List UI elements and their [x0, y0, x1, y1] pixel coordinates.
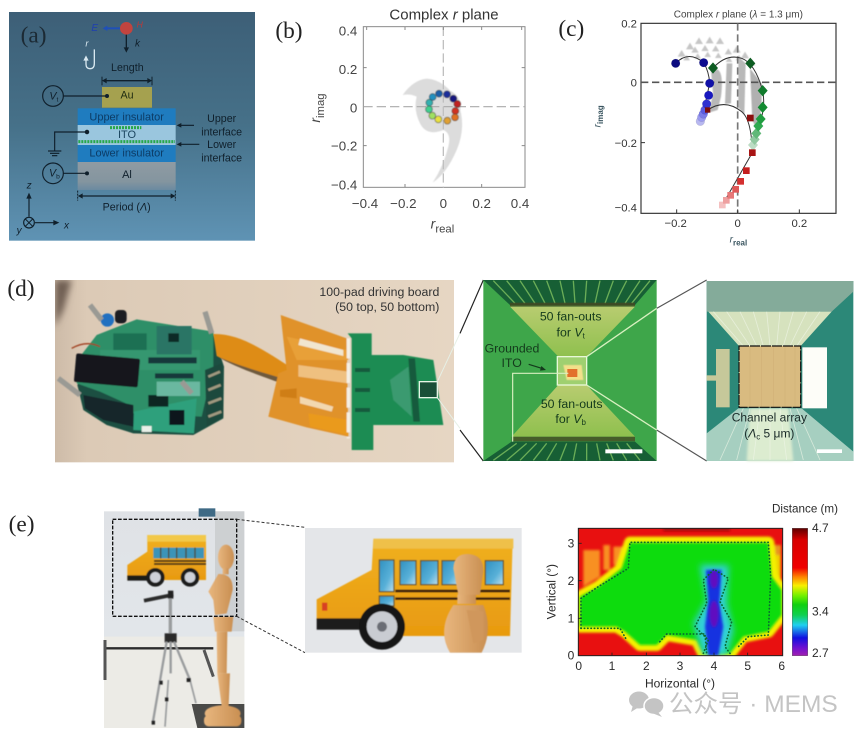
chip labels: ITO [502, 356, 522, 370]
channel array label: c [756, 433, 760, 442]
photo contents: controller board [58, 305, 224, 435]
axis titles [307, 93, 454, 236]
panel (c): complex r plane at 1.3 um chart [558, 9, 836, 247]
layer stack: Lower insulator [89, 147, 164, 159]
tick labels [568, 536, 785, 673]
chip labels: t [583, 332, 586, 341]
photo caption: 100-pad driving board [319, 285, 439, 299]
label (b): (b) [275, 18, 303, 44]
axis titles: real [435, 224, 454, 236]
channel array label: 5 μm) [760, 427, 794, 441]
icon: E H k field axes: E [91, 23, 98, 34]
Au electrode [102, 87, 152, 108]
dotted object outlines [581, 542, 771, 656]
tick labels: 2 [568, 574, 575, 588]
tick labels: −0.2 [390, 196, 416, 211]
photo background [55, 280, 454, 462]
layer stack: Upper insulator [89, 112, 164, 124]
interface labels: Upper [207, 113, 237, 125]
small toy bus [127, 535, 206, 587]
ITO pointer arrow [529, 364, 546, 371]
coordinate axes [16, 181, 70, 236]
white inset box [419, 333, 460, 428]
chip labels: for V [555, 412, 581, 426]
dark corner shade [55, 280, 72, 327]
axis titles [592, 105, 747, 247]
length dimension: Length [111, 62, 144, 74]
tick labels [331, 23, 530, 211]
gray reachable region [403, 79, 462, 183]
period dimension: Period (Λ) [103, 202, 151, 214]
chip labels: for V [557, 326, 583, 340]
tick labels: 4 [711, 659, 718, 673]
Au electrode: Au [120, 90, 134, 102]
chip labels [485, 310, 603, 427]
large toy bus [317, 539, 513, 650]
coordinate axes: y [16, 225, 23, 236]
label (a): (a) [21, 23, 47, 49]
large mannequin [444, 554, 488, 653]
period dimension [78, 191, 175, 214]
zoom background [305, 528, 522, 653]
voltage Vt: V [49, 90, 56, 102]
tick labels: 0.4 [511, 196, 530, 211]
tick labels: 0 [575, 659, 582, 673]
connecting curves [676, 56, 764, 205]
channel array micrograph [707, 281, 853, 461]
length dimension [102, 62, 152, 85]
photo contents: flexible ribbon cables [213, 315, 348, 438]
tick labels: 3 [568, 536, 575, 550]
tick labels: 5 [744, 659, 751, 673]
axis titles: r [307, 118, 323, 123]
chip labels: Grounded [485, 341, 540, 355]
chip micrograph [483, 280, 657, 461]
tick labels: −0.4 [352, 196, 379, 211]
coordinate axes: z [26, 181, 32, 192]
axis titles: Vertical (°) [544, 564, 558, 619]
interface labels: interface [201, 126, 242, 138]
interface labels: Lower [207, 139, 237, 151]
photo caption [319, 285, 439, 314]
tick labels: 1 [609, 659, 616, 673]
watermark text: 公众号 · MEMS [669, 691, 838, 718]
voltage Vb [43, 163, 89, 184]
icon: E H k field axes [91, 19, 144, 53]
interface labels [177, 113, 242, 164]
wooden mannequin [204, 545, 241, 726]
axis titles: r [592, 124, 603, 127]
panel (d): fan-out chip and channel array [460, 280, 853, 461]
color bar: 3.4 [812, 605, 829, 619]
tick labels: 2 [643, 659, 650, 673]
color bar [792, 521, 829, 660]
blue circle series [671, 58, 714, 126]
dashed crop box [113, 519, 237, 616]
tripod [144, 591, 196, 727]
tick labels: −0.2 [331, 139, 357, 154]
chip labels: b [581, 418, 586, 427]
voltage Vb: b [56, 174, 60, 181]
interface labels: interface [201, 152, 242, 164]
plot frame and axes [363, 27, 525, 187]
heat map field [578, 527, 783, 656]
label (c): (c) [558, 16, 584, 42]
ground wire [48, 130, 89, 156]
zoom connector lines [460, 280, 707, 461]
panel (e): zoomed bus and mannequin photo [305, 528, 522, 653]
tick labels: −0.4 [331, 177, 358, 192]
panel (d): driving board photo [7, 276, 460, 462]
icon: E H k field axes: k [135, 39, 141, 50]
panel (a): device schematic [9, 12, 255, 241]
tick labels: 0 [350, 101, 357, 116]
tick marks [578, 543, 748, 656]
channel array label: Channel array [732, 411, 807, 425]
heat map frame [578, 528, 783, 656]
chart title: Complex r plane [389, 6, 499, 23]
panel (e): distance heat map [544, 503, 838, 691]
panel (b): complex r plane chart [275, 6, 530, 236]
zoom guide lines [237, 519, 305, 653]
label (e): (e) [9, 511, 35, 537]
tick labels: −0.2 [615, 138, 637, 150]
axis titles: imag [315, 93, 327, 118]
layer stack [78, 108, 176, 190]
tick labels: −0.4 [615, 202, 637, 214]
chip labels: 50 fan-outs [541, 397, 603, 411]
photo contents: 100-pad PCB [348, 333, 443, 450]
coordinate axes: x [63, 221, 70, 232]
tick labels: 0.4 [339, 23, 358, 38]
tick labels: 0.2 [472, 196, 491, 211]
tick labels: 0 [568, 649, 575, 663]
tick labels: 0 [440, 196, 447, 211]
color bar: 2.7 [812, 646, 829, 660]
tick labels: 3 [677, 659, 684, 673]
photo background [104, 508, 244, 728]
icon: reflected arrow r [83, 39, 94, 69]
layer stack: Al [122, 169, 132, 181]
icon: chat bubbles [629, 692, 664, 717]
icon: reflected arrow r: r [85, 39, 89, 49]
plot frame and axes [641, 23, 836, 213]
label (d): (d) [7, 276, 35, 302]
channel array label [732, 411, 807, 442]
axis titles: real [733, 238, 747, 247]
icon: E H k field axes: H [137, 19, 144, 29]
tick labels [615, 18, 807, 230]
axis titles [544, 564, 715, 691]
tick labels: 0.2 [791, 218, 807, 230]
tick labels: 0 [735, 218, 741, 230]
tick labels: 0 [631, 77, 637, 89]
gray triangle bands [678, 37, 762, 130]
axis titles: imag [596, 105, 605, 124]
tick labels: 0.2 [339, 62, 357, 77]
chip labels: 50 fan-outs [540, 310, 602, 324]
photo caption: (50 top, 50 bottom) [335, 300, 439, 314]
axis titles: r [730, 235, 733, 246]
red square series [705, 107, 756, 208]
voltage Vb: V [49, 168, 56, 180]
voltage Vt: t [56, 96, 58, 103]
axis titles: Horizontal (°) [645, 677, 715, 691]
color bar: 4.7 [812, 521, 829, 535]
tick labels: −0.2 [664, 218, 687, 230]
panel (e): experiment photo [9, 508, 305, 728]
voltage Vt [43, 86, 109, 106]
tick labels: 6 [778, 659, 785, 673]
watermark [629, 691, 838, 718]
chart title: Complex r plane (λ = 1.3 μm) [674, 9, 803, 20]
tick labels: 1 [568, 611, 575, 625]
colored phase ring points [426, 90, 461, 124]
tick labels: 0.2 [621, 18, 637, 30]
axis titles: r [431, 216, 435, 232]
color bar title: Distance (m) [772, 503, 838, 516]
green diamond series [708, 58, 768, 151]
channel array label: (Λ [744, 427, 756, 441]
layer stack: ITO [118, 129, 137, 141]
